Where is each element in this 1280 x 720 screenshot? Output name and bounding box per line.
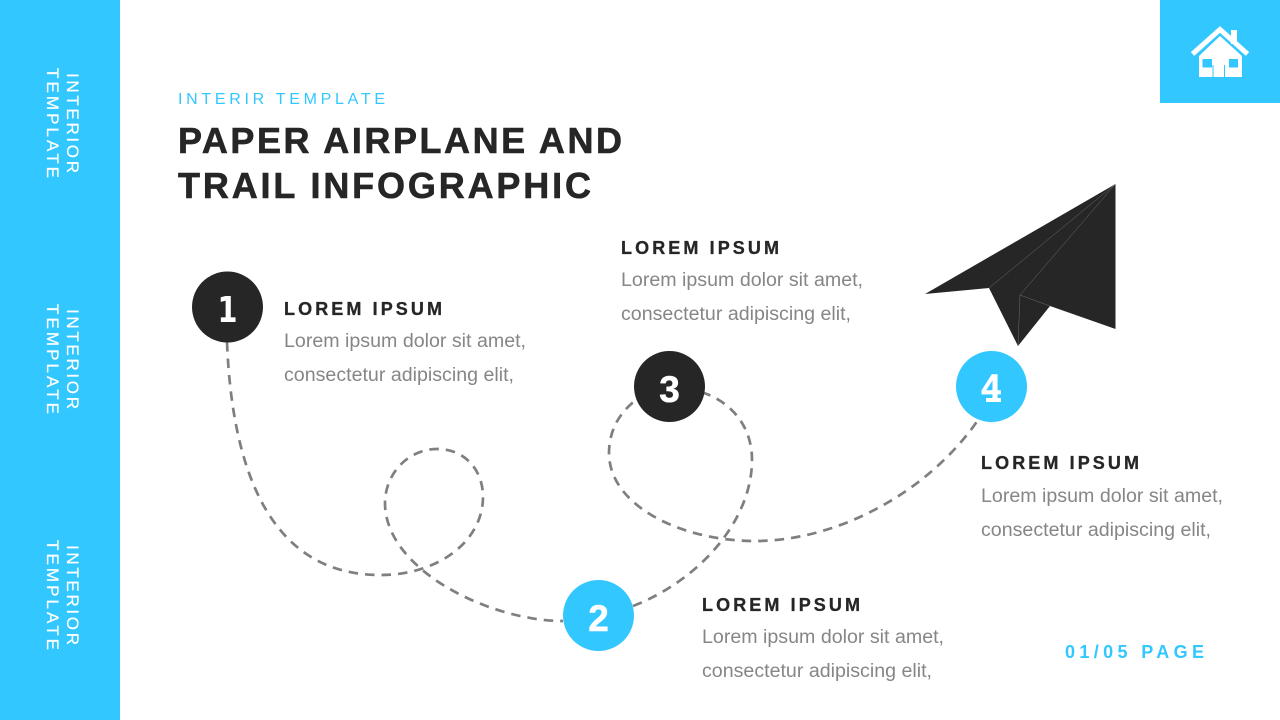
step 1 text: LOREM IPSUM: [284, 299, 442, 319]
step 3 marker: 3: [659, 369, 680, 410]
step 2 text: [702, 595, 944, 682]
step 1 marker: 1: [217, 289, 238, 331]
title: PAPER AIRPLANE AND: [178, 120, 622, 161]
step 4 text: consectetur adipiscing elit,: [981, 520, 1211, 541]
step 1 text: consectetur adipiscing elit,: [284, 365, 514, 386]
step 4 text: LOREM IPSUM: [981, 453, 1139, 473]
title: [178, 120, 622, 206]
step 2 marker: [563, 580, 634, 651]
panel: left sidebar: [0, 0, 120, 720]
sidebar label: top: INTERIOR: [63, 73, 82, 173]
page number: 01/05 PAGE: [1065, 642, 1204, 662]
sidebar label: middle: [43, 304, 82, 414]
dashed trail: segment from point 1 to point 2: [227, 342, 563, 621]
subtitle: INTERIR TEMPLATE: [178, 91, 385, 108]
sidebar label: middle: TEMPLATE: [43, 304, 62, 414]
step 3 text: consectetur adipiscing elit,: [621, 304, 851, 325]
step 4 text: Lorem ipsum dolor sit amet,: [981, 486, 1223, 507]
step 1 marker: [192, 272, 263, 342]
step 4 marker: 4: [981, 368, 1001, 407]
sidebar label: bottom: [43, 540, 82, 650]
sidebar label: middle: INTERIOR: [63, 309, 82, 409]
sidebar label: bottom: TEMPLATE: [43, 540, 62, 650]
sidebar label: top: [43, 68, 82, 178]
step 1 text: Lorem ipsum dolor sit amet,: [284, 331, 526, 352]
dashed trail: segment from point 2 through point 3 to point 4: [609, 387, 978, 606]
sidebar label: bottom: INTERIOR: [63, 545, 82, 645]
sidebar label: top: TEMPLATE: [43, 68, 62, 178]
step 2 text: consectetur adipiscing elit,: [702, 661, 932, 682]
step 2 text: LOREM IPSUM: [702, 595, 860, 615]
step 3 text: LOREM IPSUM: [621, 238, 779, 258]
icon: house badge: [1160, 0, 1280, 103]
icon: paper airplane: [925, 184, 1116, 346]
step 1 text: [284, 299, 526, 386]
step 2 marker: 2: [588, 598, 609, 639]
step 3 text: Lorem ipsum dolor sit amet,: [621, 270, 863, 291]
step 3 text: [621, 238, 863, 325]
step 4 marker: [956, 351, 1027, 422]
step 2 text: Lorem ipsum dolor sit amet,: [702, 627, 944, 648]
step 3 marker: [634, 351, 705, 422]
title: TRAIL INFOGRAPHIC: [178, 165, 591, 206]
step 4 text: [981, 453, 1223, 541]
